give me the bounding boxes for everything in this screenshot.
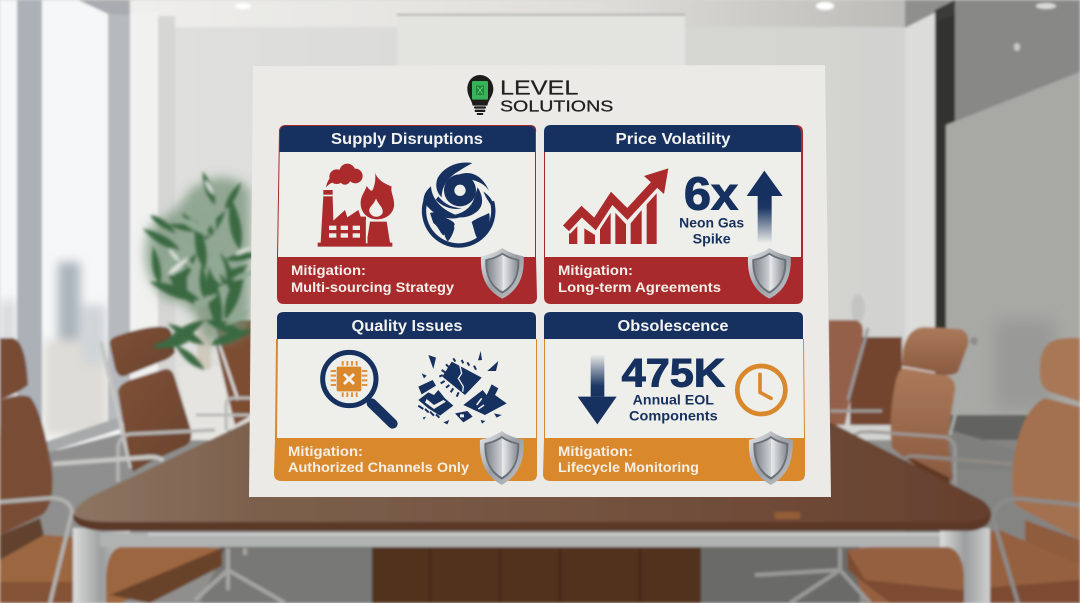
cabinet [850,337,902,425]
mitigation band: Authorized Channels Only [288,459,469,475]
heading [277,312,536,339]
mitigation band [274,438,537,481]
chair big left [0,338,28,400]
stat: 6x neon gas spike [679,167,744,246]
icon: clock [737,366,785,414]
table underside [372,547,701,603]
icon: shield [749,431,793,485]
panel: price volatility [544,125,803,304]
right glass wall [905,0,1080,603]
logo text [500,77,613,116]
board [249,65,831,497]
stat: 475K annual EOL components [622,352,725,424]
mitigation band: Mitigation: [288,443,363,459]
heading [544,125,801,152]
icon: factory with fire [318,164,394,247]
stat: 6x neon gas spike: 6x [684,167,738,219]
icon: broken chips [418,351,507,424]
icon: shield [481,248,524,299]
mitigation band: Multi-sourcing Strategy [291,279,454,295]
stat: 6x neon gas spike: Neon Gas [679,215,744,231]
chair arm big left [0,498,72,603]
stat: 475K annual EOL components: Annual EOL [633,393,714,408]
arrow: down [578,354,617,424]
mitigation band: Lifecycle Monitoring [558,459,699,475]
logo text: SOLUTIONS [500,99,613,116]
mitigation band [543,438,805,481]
chair base right [755,548,870,603]
mitigation band: Mitigation: [558,443,633,459]
chair base left [195,548,285,603]
arrow: up [747,171,783,243]
panel: quality issues [274,311,537,485]
mitigation band: Mitigation: [291,262,366,278]
heading: Obsolescence [618,318,729,335]
back chairs [215,320,252,425]
panel: obsolescence [543,311,805,485]
chair 2 left [101,342,131,468]
icon: hurricane over globe [423,162,494,246]
chair big right [1040,338,1080,402]
heading: Price Volatility [616,131,731,148]
chair right [902,327,968,375]
icon: shield [748,248,791,299]
wall mounted fixture [851,294,865,322]
icon: magnifier inspecting chip [323,352,393,424]
heading: Supply Disruptions [331,131,483,148]
stat: 475K annual EOL components: 475K [622,352,725,396]
icon: light bulb with chip [467,75,493,115]
table legs and rail [73,528,130,603]
logo text: LEVEL [500,77,578,99]
pot [178,365,228,440]
plant [140,170,261,373]
table top [73,421,991,531]
panel: supply disruptions [277,125,537,304]
mitigation band: Long-term Agreements [558,279,721,295]
icon: rising chart [566,168,668,244]
stat: 6x neon gas spike: Spike [693,230,731,246]
heading [279,125,536,152]
left window [0,0,130,450]
logo [467,75,613,116]
floor [50,430,250,540]
mitigation band: Mitigation: [558,262,633,278]
mitigation band [277,257,537,304]
icon: shield [480,431,524,485]
heading [544,312,803,339]
heading: Quality Issues [352,318,463,335]
mitigation band [544,257,803,304]
stat: 475K annual EOL components: Components [629,409,718,424]
